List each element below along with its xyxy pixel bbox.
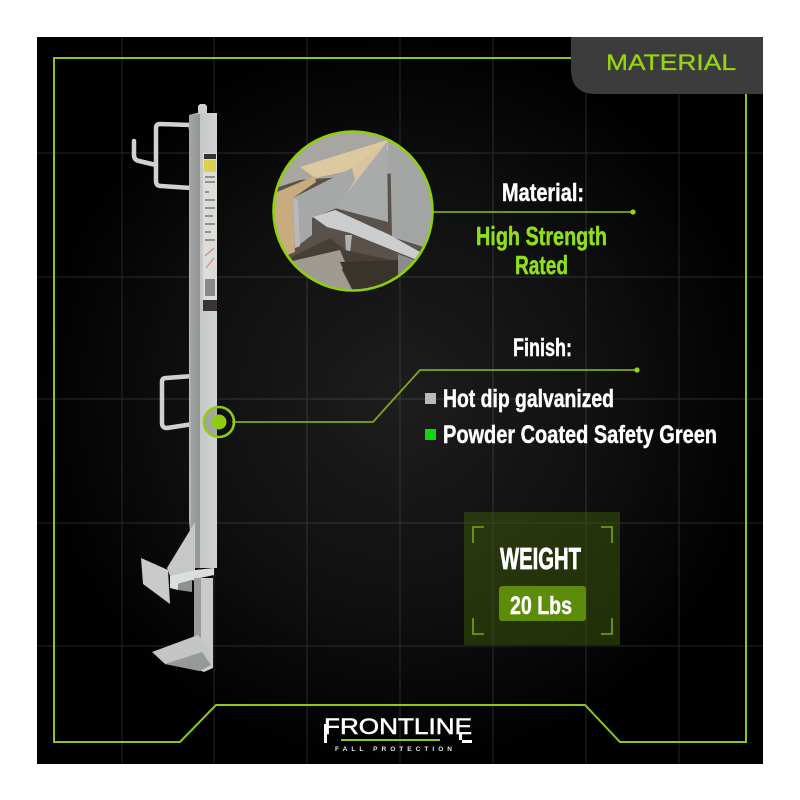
photo: bracket close-up (270, 130, 440, 295)
middle handle bracket (162, 376, 193, 428)
heading: material: Material: (502, 179, 584, 207)
value: high strength rated (476, 221, 607, 280)
post top cap (198, 104, 207, 114)
product: guardrail post (134, 104, 217, 672)
logo: frontline: FALL PROTECTION (335, 746, 452, 753)
lower tube (194, 578, 213, 672)
lower gusset plate (167, 522, 195, 576)
weight value badge (499, 586, 586, 621)
post label (203, 153, 217, 311)
value: high strength rated: High Strength (476, 221, 607, 251)
swatch: safety green (425, 429, 436, 440)
tab title: MATERIAL (606, 50, 736, 75)
finish list (425, 385, 717, 449)
logo: frontline: FRONTLINE (324, 714, 472, 739)
bottom foot (152, 635, 211, 671)
panel: weight (464, 512, 620, 645)
item: powder coated safety green: Powder Coated Safety Green (443, 421, 717, 449)
heading: finish: Finish: (513, 334, 572, 362)
callout line: material (433, 209, 636, 215)
green frame outline (54, 58, 746, 742)
item: hot dip galvanized: Hot dip galvanized (443, 385, 614, 413)
weight heading: WEIGHT (500, 541, 581, 576)
logo: frontline (324, 714, 472, 753)
swatch: galvanized (425, 393, 436, 404)
square tube (189, 113, 217, 568)
top handle bracket (134, 124, 191, 188)
callout line: finish (232, 367, 640, 422)
weight value badge: 20 Lbs (510, 592, 572, 620)
callout marker (204, 407, 234, 437)
value: high strength rated: Rated (515, 250, 568, 280)
tab: material (571, 37, 763, 94)
